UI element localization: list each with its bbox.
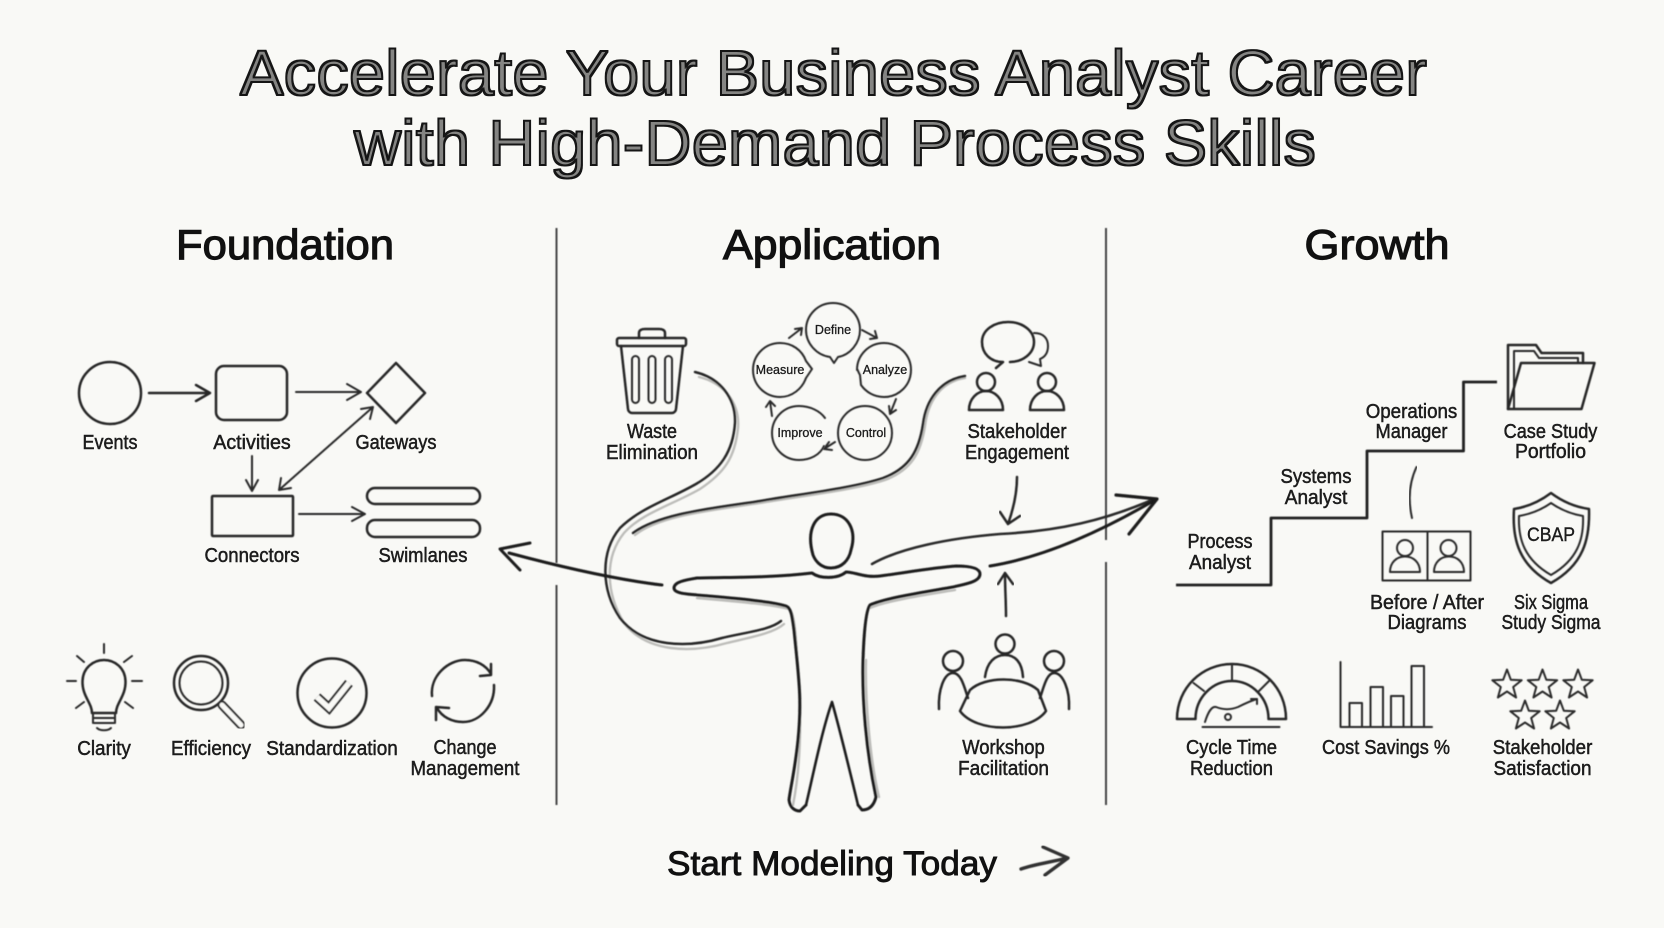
label: events: Events <box>82 432 138 454</box>
label: workshop facilitation <box>958 737 1049 780</box>
icon: activities rectangle <box>216 366 287 420</box>
label: connectors: Connectors <box>204 545 300 567</box>
label: process analyst <box>1188 531 1252 574</box>
icon: workshop <box>939 634 1069 728</box>
title <box>240 37 1427 179</box>
heading: growth: Growth <box>1304 221 1450 268</box>
arrow: connectors to swimlanes <box>299 507 365 521</box>
node: control: Control <box>846 426 886 440</box>
label: six sigma: Six Sigma <box>1514 592 1589 614</box>
arrow: activities to gateways <box>296 384 361 400</box>
arrow: stakeholder engagement to growth <box>1000 477 1020 524</box>
label: waste elimination: Waste <box>627 421 677 443</box>
label: stakeholder satisfaction: Satisfaction <box>1494 758 1592 780</box>
arrow: activities to connectors <box>246 456 258 491</box>
icon: check circle <box>298 658 366 728</box>
label: six sigma <box>1502 592 1601 634</box>
icon: trash can <box>617 329 686 413</box>
node: measure: Measure <box>756 363 804 377</box>
heading: application: Application <box>723 221 941 268</box>
process diagram <box>79 362 480 537</box>
icon: satisfaction stars <box>1492 670 1593 728</box>
label: operations manager: Manager <box>1376 421 1448 443</box>
label: operations manager: Operations <box>1366 401 1457 423</box>
call to action: Start Modeling Today <box>667 845 997 883</box>
label: before after diagrams <box>1370 592 1484 634</box>
label: efficiency: Efficiency <box>171 738 251 760</box>
label: stakeholder satisfaction <box>1493 737 1593 780</box>
flow curve: waste elimination <box>605 372 784 649</box>
label: before after diagrams: Diagrams <box>1388 612 1466 634</box>
label: cycle time reduction: Cycle Time <box>1186 737 1277 759</box>
title: Accelerate Your Business Analyst Career <box>240 37 1427 109</box>
label: standardization: Standardization <box>266 738 398 760</box>
cycle arrows <box>766 328 896 450</box>
connector line <box>1410 467 1416 518</box>
icon: cost savings bar chart <box>1340 662 1432 727</box>
label: waste elimination <box>606 421 698 464</box>
node: measure <box>753 343 812 397</box>
arrow: big left arrow to foundation <box>500 543 662 585</box>
label: cost savings: Cost Savings % <box>1322 737 1450 759</box>
label: stakeholder satisfaction: Stakeholder <box>1493 737 1593 759</box>
node: analyze <box>857 343 911 397</box>
arrow: workshop to figure <box>998 573 1013 616</box>
arrow: gateways to connectors <box>279 407 373 490</box>
flow curve: stakeholder engagement <box>633 376 965 535</box>
arrow: big right arrow to growth <box>872 495 1157 566</box>
label: case study portfolio <box>1504 421 1597 463</box>
label: change management: Change <box>434 737 496 759</box>
label: swimlanes: Swimlanes <box>378 545 468 567</box>
central figure <box>674 514 980 811</box>
icon: CBAP shield <box>1514 493 1589 583</box>
icon: gateway diamond <box>367 363 425 423</box>
panel: foundation <box>67 221 520 780</box>
icon: magnifier <box>174 656 241 725</box>
label: six sigma: Study Sigma <box>1502 612 1601 634</box>
icon: change cycle <box>432 660 494 722</box>
arrow: events to activities <box>149 385 210 401</box>
label: process analyst: Process <box>1188 531 1252 553</box>
label: cycle time reduction: Reduction <box>1190 758 1273 780</box>
label: case study portfolio: Case Study <box>1504 421 1597 443</box>
icon: light bulb <box>67 644 142 730</box>
icon: folder <box>1508 345 1594 409</box>
panel: application <box>500 221 1157 883</box>
label: case study portfolio: Portfolio <box>1515 441 1586 463</box>
DMAIC cycle <box>753 303 911 460</box>
icon: swimlanes <box>367 488 480 537</box>
heading: foundation: Foundation <box>176 221 394 268</box>
label: process analyst: Analyst <box>1189 552 1251 574</box>
panel: growth <box>1176 221 1601 780</box>
label: workshop facilitation: Facilitation <box>958 758 1049 780</box>
label: stakeholder engagement <box>965 421 1069 464</box>
label: systems analyst: Analyst <box>1285 487 1348 509</box>
node: improve <box>772 406 825 460</box>
label: operations manager <box>1366 401 1457 443</box>
icon: events circle <box>79 362 141 424</box>
node: analyze: Analyze <box>863 363 907 377</box>
label: cycle time reduction <box>1186 737 1277 780</box>
icon: stakeholder engagement <box>969 322 1064 410</box>
node: control <box>838 406 892 460</box>
label: systems analyst: Systems <box>1280 466 1352 488</box>
icon: before and after diagrams <box>1382 532 1470 580</box>
label: stakeholder engagement: Stakeholder <box>968 421 1067 443</box>
label: waste elimination: Elimination <box>606 442 698 464</box>
label: systems analyst <box>1280 466 1352 509</box>
label: clarity: Clarity <box>77 738 131 760</box>
node: improve: Improve <box>777 426 823 440</box>
label: activities: Activities <box>213 432 291 454</box>
icon: cycle time gauge <box>1177 664 1286 727</box>
icon: CBAP shield: CBAP <box>1527 525 1575 546</box>
node: define: Define <box>815 323 851 337</box>
label: stakeholder engagement: Engagement <box>965 442 1069 464</box>
label: change management <box>410 737 520 780</box>
label: before after diagrams: Before / After <box>1370 592 1484 614</box>
icon: connectors rectangle <box>212 496 293 536</box>
label: change management: Management <box>410 758 520 780</box>
title: with High-Demand Process Skills <box>353 107 1316 179</box>
career staircase <box>1176 382 1497 585</box>
label: workshop facilitation: Workshop <box>962 737 1045 759</box>
label: gateways: Gateways <box>356 432 436 454</box>
node: define <box>806 303 860 363</box>
